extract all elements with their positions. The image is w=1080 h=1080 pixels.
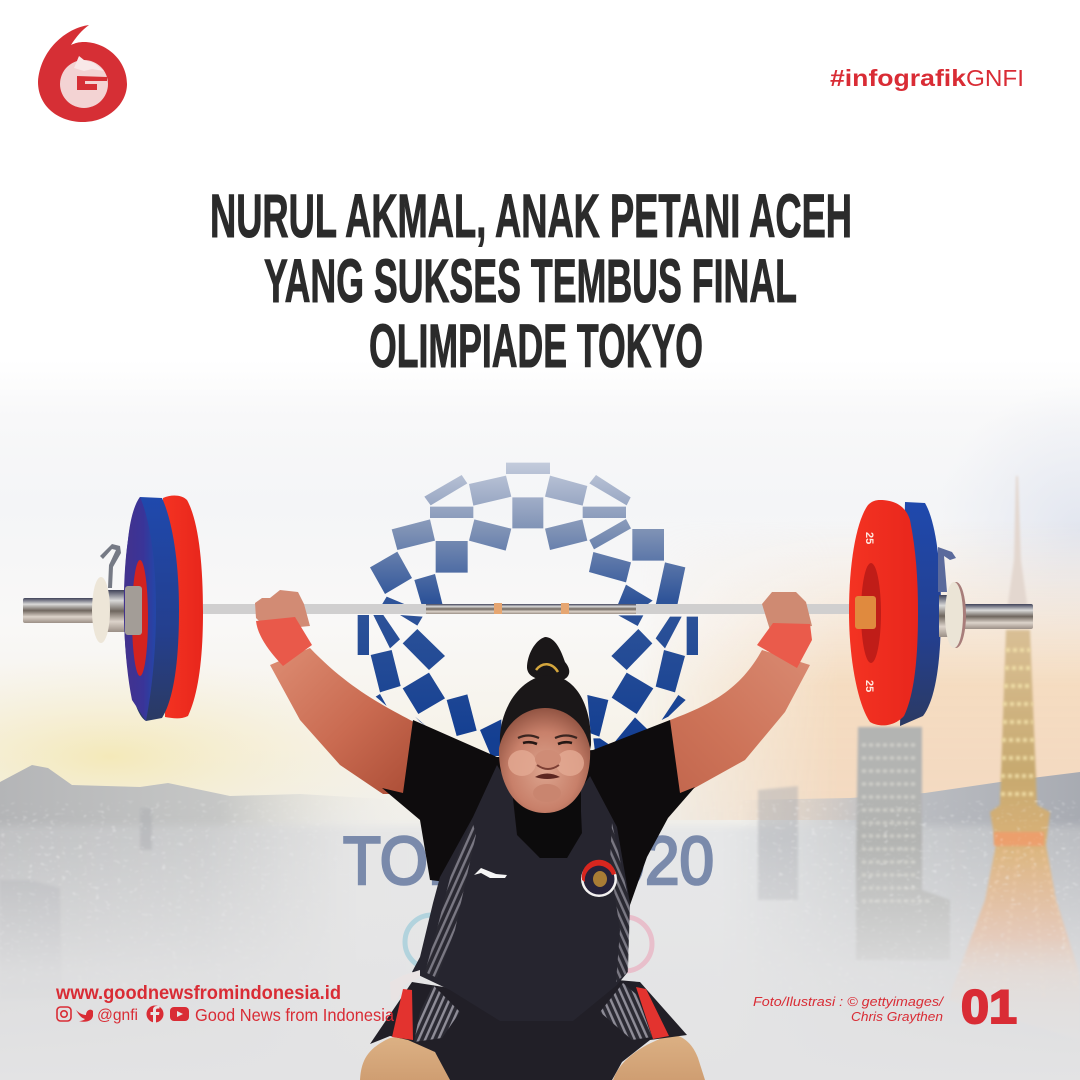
title [210, 182, 852, 380]
icon: twitter [76, 1010, 93, 1022]
credit: photo source [753, 994, 945, 1024]
right red plate [849, 500, 918, 725]
right plate hole [861, 563, 881, 663]
text: TOKYO 2020 wordmark: TOKYO 2020 [343, 823, 714, 899]
barbell [23, 496, 1033, 726]
right blue plate [900, 502, 941, 726]
icon: facebook [146, 1006, 164, 1023]
left blue plate [124, 497, 179, 721]
icon: Olympic rings behind athlete [405, 915, 652, 971]
right white disc [946, 582, 966, 648]
hashtag: #infografikGNFI [830, 65, 1024, 91]
channel name: Good News from Indonesia [195, 1005, 394, 1025]
thighs [360, 1034, 705, 1080]
left plate hole [132, 560, 148, 676]
website url: www.goodnewsfromindonesia.id [55, 983, 341, 1004]
logo eagle head [74, 56, 104, 71]
singlet neckline [513, 790, 581, 858]
footer: website and social handles [55, 983, 394, 1025]
right chrome barrel [939, 595, 963, 637]
right plate label 25: 25 [863, 532, 875, 544]
handle: @gnfi [97, 1007, 138, 1024]
arm: left [270, 648, 416, 794]
right plate label 25 lower: 25 [863, 680, 875, 692]
hashtag: #infografikGNFI: #infografik [830, 65, 966, 91]
left red plate [163, 496, 203, 718]
right orange collar [855, 596, 876, 629]
page number: 01: 01 [961, 980, 1017, 1033]
arm: right [669, 650, 810, 795]
emblem: Tokyo 2020 chequered ring [358, 463, 698, 756]
logo inner ring [60, 60, 108, 108]
face [499, 708, 590, 813]
black shirt [382, 720, 695, 905]
logo: GNFI red swirl emblem [38, 25, 127, 122]
bar shaft [203, 604, 860, 614]
left hook collar [100, 544, 121, 588]
white towel at hip [390, 970, 420, 1002]
icon: youtube [170, 1007, 189, 1021]
icon: instagram [57, 1007, 71, 1021]
left white disc [92, 577, 110, 643]
hair and bun [500, 637, 591, 760]
left sleeve end [23, 598, 103, 623]
hashtag: #infografikGNFI: GNFI [966, 65, 1024, 91]
credit: photo source: Chris Graythen [851, 1009, 943, 1024]
wrist wrap: right [757, 623, 812, 668]
singlet logo [474, 868, 507, 878]
logo letter G [77, 76, 107, 90]
singlet national badge [581, 860, 617, 897]
left chrome barrel [106, 590, 128, 632]
shorts stripes [392, 983, 669, 1042]
singlet side stripes [425, 820, 630, 982]
background: Tokyo sunset skyline photo [0, 360, 1080, 1080]
hand: left [255, 590, 310, 630]
title: OLIMPIADE TOKYO [369, 312, 703, 380]
credit: photo source: Foto/Ilustrasi : © gettyimages/ [753, 994, 945, 1009]
wrist wrap: left [256, 617, 312, 666]
right hook [938, 547, 956, 592]
left iron collar [125, 586, 142, 635]
athlete: Nurul Akmal in snatch squat [255, 590, 812, 1080]
facial features [508, 736, 584, 802]
hair tie [536, 664, 558, 672]
shorts [370, 980, 687, 1080]
right sleeve end [960, 604, 1033, 629]
hand: right [762, 592, 812, 630]
singlet [412, 765, 630, 1021]
